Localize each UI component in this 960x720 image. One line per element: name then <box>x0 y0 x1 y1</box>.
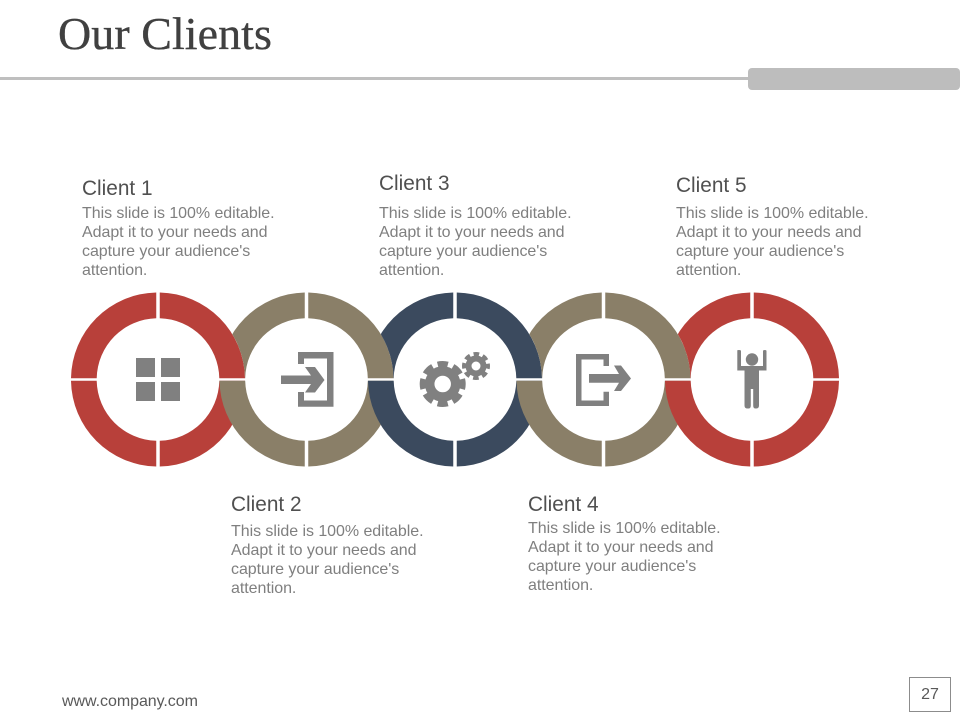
text block: client 3 <box>379 172 571 279</box>
icon: enter arrow <box>281 352 334 407</box>
body: client 1: Adapt it to your needs and <box>82 224 268 241</box>
icon: gears <box>423 354 488 404</box>
ring 3 <box>368 292 542 466</box>
body: client 4: Adapt it to your needs and <box>528 539 714 556</box>
page number box: 27 <box>921 686 939 703</box>
heading: client 2: Client 2 <box>231 493 302 516</box>
body: client 1 <box>82 205 274 279</box>
text block: client 4 <box>528 493 720 594</box>
ring 1 <box>71 292 245 466</box>
body: client 5: Adapt it to your needs and <box>676 224 862 241</box>
body: client 3: capture your audience's <box>379 243 547 260</box>
body: client 1: attention. <box>82 262 147 279</box>
icon: four squares <box>136 358 180 401</box>
interlocking ring chain <box>71 292 839 466</box>
body: client 1: This slide is 100% editable. <box>82 205 274 222</box>
icon: person with raised arms <box>737 350 766 408</box>
body: client 5: This slide is 100% editable. <box>676 205 868 222</box>
body: client 3: attention. <box>379 262 444 279</box>
body: client 3: Adapt it to your needs and <box>379 224 564 241</box>
body: client 3: This slide is 100% editable. <box>379 205 571 222</box>
body: client 4: capture your audience's <box>528 558 696 575</box>
ring 2 <box>220 292 394 466</box>
heading: client 4: Client 4 <box>528 493 599 516</box>
body: client 2: This slide is 100% editable. <box>231 523 423 540</box>
body: client 4 <box>528 520 720 594</box>
icon: exit arrow <box>576 354 631 406</box>
body: client 2 <box>231 523 423 597</box>
body: client 5: capture your audience's <box>676 243 844 260</box>
body: client 2: capture your audience's <box>231 561 399 578</box>
body: client 1: capture your audience's <box>82 243 250 260</box>
ring 4 <box>516 292 690 466</box>
ring 5 <box>665 292 839 466</box>
header rule <box>0 77 750 80</box>
body: client 2: attention. <box>231 580 296 597</box>
heading: client 5: Client 5 <box>676 174 747 197</box>
body: client 4: This slide is 100% editable. <box>528 520 720 537</box>
heading: client 1: Client 1 <box>82 177 153 200</box>
footer url: www.company.com <box>62 693 198 710</box>
header bar <box>748 68 960 90</box>
page number box <box>909 677 951 712</box>
title: Our Clients <box>58 8 272 59</box>
text block: client 2 <box>231 493 423 597</box>
body: client 5: attention. <box>676 262 741 279</box>
body: client 3 <box>379 205 571 279</box>
heading: client 3: Client 3 <box>379 172 450 195</box>
body: client 4: attention. <box>528 577 593 594</box>
body: client 2: Adapt it to your needs and <box>231 542 416 559</box>
text block: client 5 <box>676 174 868 279</box>
body: client 5 <box>676 205 868 279</box>
text block: client 1 <box>82 177 274 279</box>
